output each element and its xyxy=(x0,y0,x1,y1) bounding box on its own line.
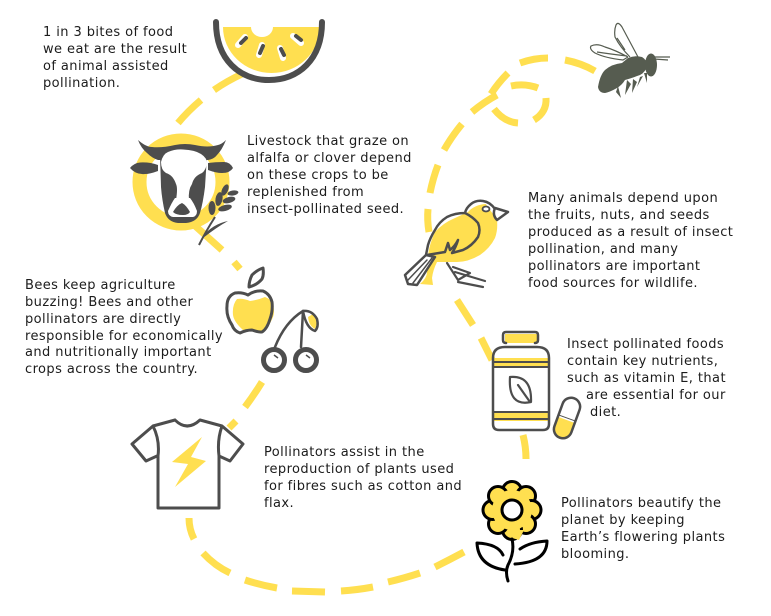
text: one in three bites xyxy=(43,25,187,91)
text: bees keep agriculture buzzing: and nutritionally important xyxy=(25,345,212,360)
text: one in three bites: pollination. xyxy=(43,76,120,91)
icon: bird xyxy=(405,201,508,287)
text: nutrients xyxy=(567,337,726,420)
text: livestock: alfalfa or clover depend xyxy=(247,151,412,166)
text: wildlife: produced as a result of insect xyxy=(528,225,733,240)
text: livestock: on these crops to be xyxy=(247,168,389,183)
icon: flower xyxy=(477,482,547,581)
text: bees keep agriculture buzzing: pollinators are directly xyxy=(25,312,181,327)
text: bees keep agriculture buzzing: responsible for economically xyxy=(25,329,223,344)
text: one in three bites: 1 in 3 bites of food xyxy=(43,25,173,40)
text: flowering plants: Earth’s flowering plants xyxy=(561,530,725,545)
text: livestock xyxy=(247,134,412,217)
icon: vitamin bottle and capsule xyxy=(493,332,583,441)
text: flowering plants xyxy=(561,496,725,562)
text: one in three bites: we eat are the result xyxy=(43,42,187,57)
text: bees keep agriculture buzzing: buzzing! Bees and other xyxy=(25,295,194,310)
dashed flight path xyxy=(178,58,595,592)
text: fibres: flax. xyxy=(264,496,294,511)
text: nutrients: are essential for our xyxy=(586,388,726,403)
text: nutrients: contain key nutrients, xyxy=(567,354,718,369)
text: wildlife: Many animals depend upon xyxy=(528,191,718,206)
text: wildlife: food sources for wildlife. xyxy=(528,276,698,291)
icon: bee xyxy=(590,23,670,98)
text: fibres: for fibres such as cotton and xyxy=(264,479,462,494)
text: fibres xyxy=(264,445,462,511)
text: bees keep agriculture buzzing: Bees keep agriculture xyxy=(25,278,176,293)
text: wildlife: pollination, and many xyxy=(528,242,678,257)
text: wildlife: the fruits, nuts, and seeds xyxy=(528,208,710,223)
icon: apple and cherries xyxy=(227,268,318,370)
text: wildlife xyxy=(528,191,733,291)
icon: cow with wheat xyxy=(130,140,239,245)
text: livestock: replenished from xyxy=(247,185,364,200)
text: flowering plants: planet by keeping xyxy=(561,513,685,528)
text: wildlife: pollinators are important xyxy=(528,259,700,274)
text: livestock: Livestock that graze on xyxy=(247,134,409,149)
text: bees keep agriculture buzzing: crops across the country. xyxy=(25,362,198,377)
text: flowering plants: Pollinators beautify the xyxy=(561,496,721,511)
text: nutrients: diet. xyxy=(590,405,621,420)
text: fibres: Pollinators assist in the xyxy=(264,445,425,460)
icon: watermelon xyxy=(216,22,322,80)
text: livestock: insect-pollinated seed. xyxy=(247,202,404,217)
text: nutrients: such as vitamin E, that xyxy=(567,371,726,386)
text: fibres: reproduction of plants used xyxy=(264,462,454,477)
icon: t-shirt xyxy=(132,420,243,508)
text: bees keep agriculture buzzing xyxy=(25,278,223,377)
text: one in three bites: of animal assisted xyxy=(43,59,169,74)
text: flowering plants: blooming. xyxy=(561,547,629,562)
text: nutrients: Insect pollinated foods xyxy=(567,337,724,352)
